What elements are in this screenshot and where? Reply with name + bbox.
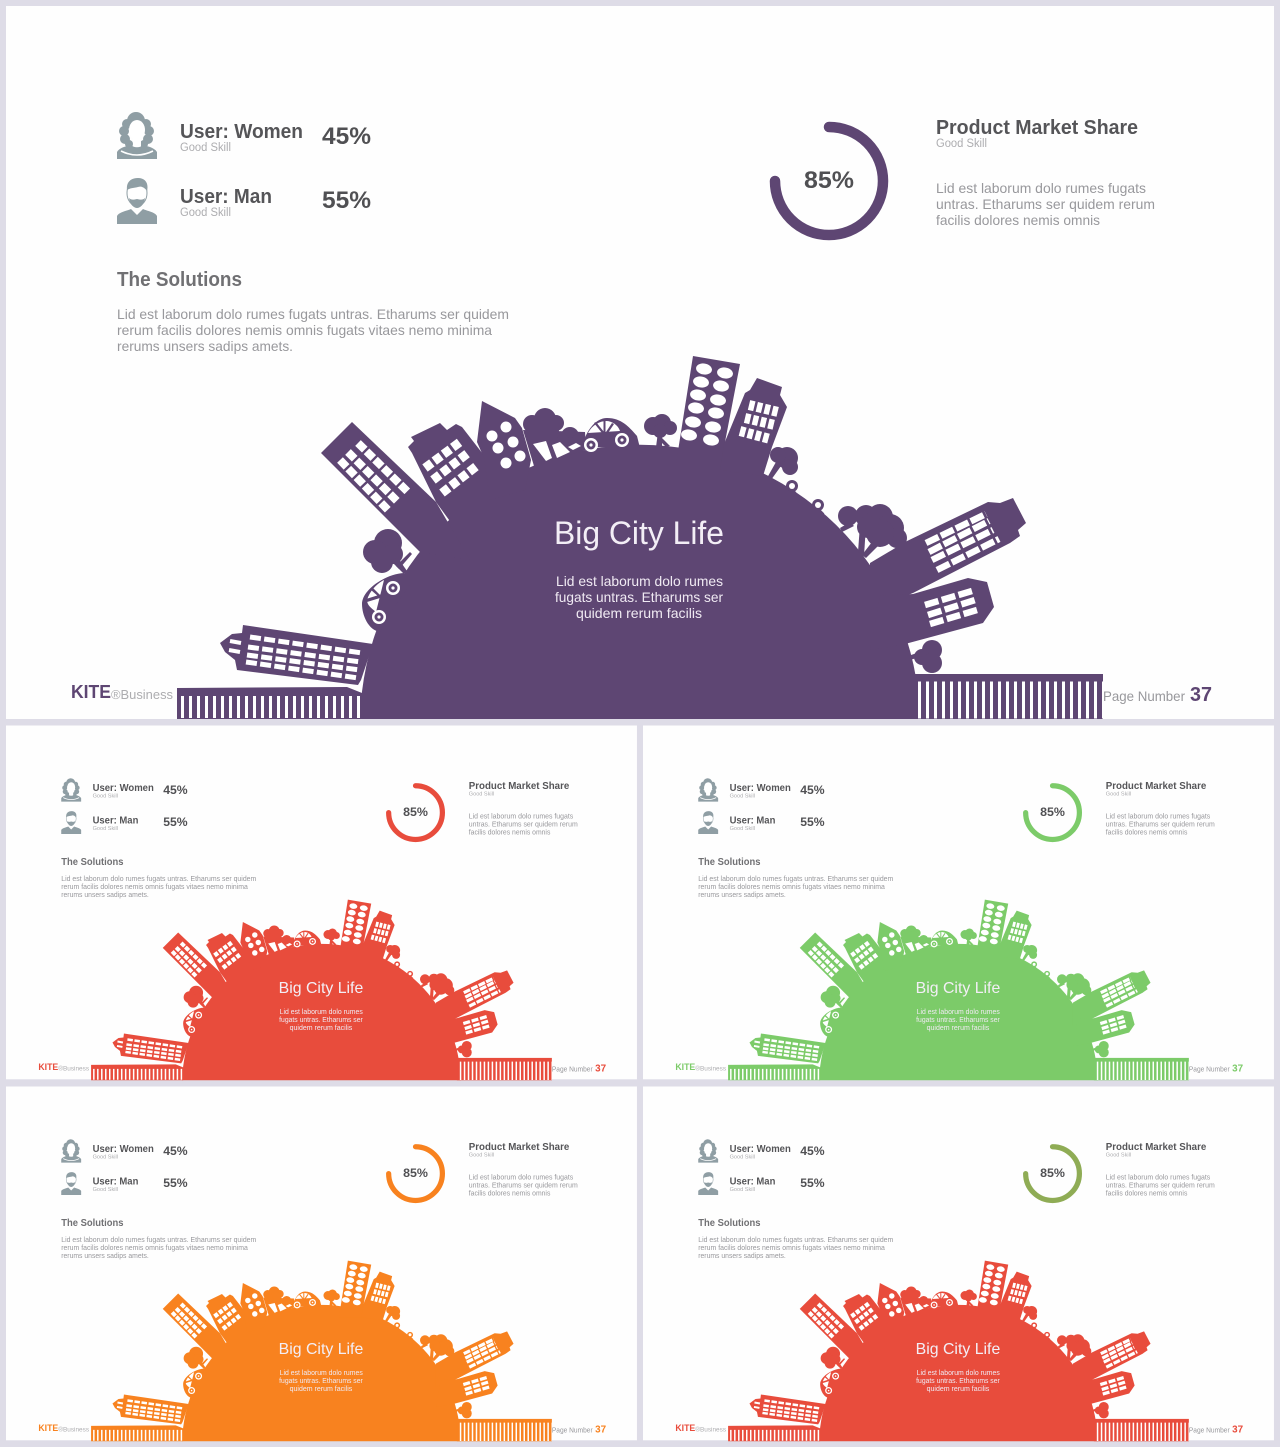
footer: page number: Page Number (552, 1066, 593, 1073)
text block: dome body: fugats untras. Etharums ser (916, 1378, 1000, 1385)
text block: market share body (469, 814, 578, 836)
title: big city life: Big City Life (554, 515, 724, 551)
text block: solutions body: rerums unsers sadips amets. (698, 892, 786, 899)
logo: kite business: ®Business (695, 1064, 726, 1072)
text block: solutions body: rerum facilis dolores nemis omnis fugats vitaes nemo minima (61, 1245, 248, 1252)
logo: kite business: KITE (38, 1423, 58, 1433)
stat: men share: 55% (800, 815, 825, 829)
text block: market share body: facilis dolores nemis omnis (1106, 1190, 1188, 1197)
text block: dome body: fugats untras. Etharums ser (555, 589, 723, 605)
illustration: city skyline on dome (177, 356, 1103, 719)
text block: solutions body: Lid est laborum dolo rumes fugats untras. Etharums ser quidem (698, 876, 893, 883)
footer: page number (1189, 1063, 1244, 1074)
stat: men share: 55% (322, 187, 371, 214)
heading: the solutions: The Solutions (61, 1218, 124, 1229)
text block: solutions body: rerum facilis dolores nemis omnis fugats vitaes nemo minima (698, 1245, 885, 1252)
logo: kite business (38, 1423, 89, 1433)
illustration: city skyline on dome (91, 1261, 552, 1441)
logo: kite business: KITE (675, 1423, 695, 1433)
text block: market share body: untras. Etharums ser quidem rerum (936, 196, 1155, 212)
label: user man: User: Man (93, 1177, 138, 1188)
text block: dome body: fugats untras. Etharums ser (279, 1017, 363, 1024)
text block: solutions body: rerum facilis dolores nemis omnis fugats vitaes nemo minima (698, 884, 885, 891)
text block: solutions body: rerum facilis dolores nemis omnis fugats vitaes nemo minima (117, 322, 492, 338)
logo: kite business: ®Business (58, 1425, 89, 1433)
label: user women: User: Women (93, 783, 154, 794)
title: big city life: Big City Life (279, 1341, 363, 1358)
sublabel: good skill: Good Skill (93, 1187, 118, 1193)
icon: woman user (698, 778, 718, 802)
text block: solutions body (698, 1237, 893, 1260)
text block: market share body (1106, 1175, 1215, 1197)
text block: solutions body: rerums unsers sadips amets. (61, 892, 149, 899)
text block: market share body (469, 1175, 578, 1197)
footer: page number: 37 (1232, 1424, 1244, 1435)
stat: men share: 55% (163, 1176, 188, 1190)
icon: man user (698, 811, 718, 834)
icon: woman user (117, 112, 157, 159)
text block: market share body: facilis dolores nemis omnis (469, 829, 551, 836)
sublabel: good skill: Good Skill (93, 826, 118, 832)
text block: dome body (916, 1009, 1000, 1032)
logo: kite business: KITE (675, 1062, 695, 1072)
logo: kite business: ®Business (695, 1425, 726, 1433)
sublabel: good skill: Good Skill (730, 1155, 755, 1161)
text block: market share body: facilis dolores nemis omnis (1106, 829, 1188, 836)
chart: donut ring 85% (775, 127, 883, 235)
label: user women: User: Women (93, 1144, 154, 1155)
logo: kite business: ®Business (111, 687, 173, 702)
text block: solutions body: rerums unsers sadips amets. (117, 338, 293, 354)
text block: market share body: untras. Etharums ser quidem rerum (469, 822, 578, 829)
text block: dome body: quidem rerum facilis (290, 1386, 353, 1393)
text block: market share body: Lid est laborum dolo rumes fugats (469, 814, 574, 821)
footer: page number: 37 (1190, 684, 1212, 706)
heading: the solutions: The Solutions (698, 1218, 761, 1229)
text block: solutions body: Lid est laborum dolo rumes fugats untras. Etharums ser quidem (698, 1237, 893, 1244)
stat: women share: 45% (800, 1144, 825, 1158)
icon: man user (61, 811, 81, 834)
text block: market share body: facilis dolores nemis omnis (936, 212, 1100, 228)
label: user man: User: Man (730, 1177, 775, 1188)
heading: product market share: Product Market Share (469, 781, 570, 792)
sublabel: good skill: Good Skill (93, 1155, 118, 1161)
chart: donut ring 85%: 85% (403, 1166, 428, 1180)
sublabel: good skill: Good Skill (1106, 792, 1131, 798)
text block: dome body (279, 1009, 363, 1032)
sublabel: good skill: Good Skill (93, 794, 118, 800)
text block: market share body: untras. Etharums ser quidem rerum (1106, 1183, 1215, 1190)
title: big city life: Big City Life (279, 980, 363, 997)
text block: market share body: Lid est laborum dolo rumes fugats (936, 180, 1146, 196)
text block: market share body: Lid est laborum dolo rumes fugats (1106, 1175, 1211, 1182)
text block: dome body: quidem rerum facilis (927, 1025, 990, 1032)
text block: dome body: quidem rerum facilis (290, 1025, 353, 1032)
text block: dome body: Lid est laborum dolo rumes (280, 1370, 363, 1377)
icon: man user (698, 1172, 718, 1195)
text block: dome body: Lid est laborum dolo rumes (556, 573, 723, 589)
text block: solutions body: rerums unsers sadips amets. (61, 1253, 149, 1260)
text block: market share body (1106, 814, 1215, 836)
title: big city life: Big City Life (916, 980, 1000, 997)
logo: kite business: KITE (38, 1062, 58, 1072)
footer: page number (552, 1424, 607, 1435)
text block: market share body: untras. Etharums ser quidem rerum (469, 1183, 578, 1190)
panel: red slide (6, 726, 637, 1080)
logo: kite business (38, 1062, 89, 1072)
text block: market share body: Lid est laborum dolo rumes fugats (469, 1175, 574, 1182)
logo: kite business (71, 682, 173, 702)
sublabel: good skill: Good Skill (469, 792, 494, 798)
chart: donut ring 85%: 85% (403, 805, 428, 819)
sublabel: good skill: Good Skill (180, 207, 231, 219)
chart: donut ring 85% (389, 786, 442, 839)
stat: men share: 55% (163, 815, 188, 829)
logo: kite business (675, 1423, 726, 1433)
icon: man user (117, 178, 157, 224)
footer: page number: Page Number (552, 1427, 593, 1434)
text block: market share body: untras. Etharums ser quidem rerum (1106, 822, 1215, 829)
footer: page number: 37 (595, 1424, 607, 1435)
stat: women share: 45% (163, 1144, 188, 1158)
stat: women share: 45% (322, 123, 371, 150)
footer: page number (1103, 684, 1212, 706)
heading: the solutions: The Solutions (698, 857, 761, 868)
label: user women: User: Women (730, 1144, 791, 1155)
sublabel: good skill: Good Skill (180, 142, 231, 154)
text block: dome body: fugats untras. Etharums ser (916, 1017, 1000, 1024)
stat: women share: 45% (163, 783, 188, 797)
text block: solutions body: rerums unsers sadips amets. (698, 1253, 786, 1260)
text block: dome body (555, 573, 723, 621)
panel: main purple slide (6, 6, 1274, 719)
panel: green slide (643, 726, 1274, 1080)
text block: dome body: quidem rerum facilis (927, 1386, 990, 1393)
text block: solutions body: rerum facilis dolores nemis omnis fugats vitaes nemo minima (61, 884, 248, 891)
panel: orange slide (6, 1086, 637, 1441)
sublabel: good skill: Good Skill (730, 826, 755, 832)
footer: page number (1189, 1424, 1244, 1435)
footer: page number (552, 1063, 607, 1074)
illustration: city skyline on dome (91, 900, 552, 1080)
logo: kite business: KITE (71, 682, 111, 702)
icon: woman user (61, 1139, 81, 1163)
heading: product market share: Product Market Share (1106, 781, 1207, 792)
icon: man user (61, 1172, 81, 1195)
panel: red and olive slide (643, 1086, 1274, 1441)
footer: page number: Page Number (1103, 688, 1185, 704)
label: user man: User: Man (180, 186, 272, 208)
label: user women: User: Women (180, 121, 303, 143)
text block: solutions body (117, 306, 509, 354)
text block: solutions body: Lid est laborum dolo rumes fugats untras. Etharums ser quidem (61, 1237, 256, 1244)
chart: donut ring 85% (1026, 1147, 1079, 1200)
chart: donut ring 85%: 85% (804, 167, 854, 194)
label: user man: User: Man (730, 816, 775, 827)
stat: men share: 55% (800, 1176, 825, 1190)
text block: dome body (279, 1370, 363, 1393)
footer: page number: 37 (595, 1063, 607, 1074)
sublabel: good skill: Good Skill (936, 138, 987, 150)
stat: women share: 45% (800, 783, 825, 797)
heading: product market share: Product Market Share (936, 117, 1138, 139)
text block: dome body: Lid est laborum dolo rumes (917, 1009, 1000, 1016)
logo: kite business: ®Business (58, 1064, 89, 1072)
chart: donut ring 85%: 85% (1040, 1166, 1065, 1180)
text block: solutions body: Lid est laborum dolo rumes fugats untras. Etharums ser quidem (61, 876, 256, 883)
text block: dome body: quidem rerum facilis (576, 605, 702, 621)
text block: market share body (936, 180, 1155, 228)
chart: donut ring 85% (1026, 786, 1079, 839)
chart: donut ring 85% (389, 1147, 442, 1200)
text block: solutions body (698, 876, 893, 899)
text block: market share body: Lid est laborum dolo rumes fugats (1106, 814, 1211, 821)
title: big city life: Big City Life (916, 1341, 1000, 1358)
heading: the solutions: The Solutions (117, 269, 242, 291)
text block: dome body: Lid est laborum dolo rumes (280, 1009, 363, 1016)
icon: woman user (61, 778, 81, 802)
text block: market share body: facilis dolores nemis omnis (469, 1190, 551, 1197)
logo: kite business (675, 1062, 726, 1072)
footer: page number: Page Number (1189, 1427, 1230, 1434)
sublabel: good skill: Good Skill (730, 794, 755, 800)
sublabel: good skill: Good Skill (1106, 1153, 1131, 1159)
heading: the solutions: The Solutions (61, 857, 124, 868)
label: user man: User: Man (93, 816, 138, 827)
illustration: city skyline on dome (728, 900, 1189, 1080)
footer: page number: 37 (1232, 1063, 1244, 1074)
heading: product market share: Product Market Share (469, 1142, 570, 1153)
chart: donut ring 85%: 85% (1040, 805, 1065, 819)
heading: product market share: Product Market Share (1106, 1142, 1207, 1153)
illustration: city skyline on dome (728, 1261, 1189, 1441)
footer: page number: Page Number (1189, 1066, 1230, 1073)
text block: solutions body (61, 1237, 256, 1260)
label: user women: User: Women (730, 783, 791, 794)
sublabel: good skill: Good Skill (469, 1153, 494, 1159)
text block: solutions body: Lid est laborum dolo rumes fugats untras. Etharums ser quidem (117, 306, 509, 322)
icon: woman user (698, 1139, 718, 1163)
text block: dome body (916, 1370, 1000, 1393)
text block: dome body: Lid est laborum dolo rumes (917, 1370, 1000, 1377)
text block: dome body: fugats untras. Etharums ser (279, 1378, 363, 1385)
sublabel: good skill: Good Skill (730, 1187, 755, 1193)
text block: solutions body (61, 876, 256, 899)
